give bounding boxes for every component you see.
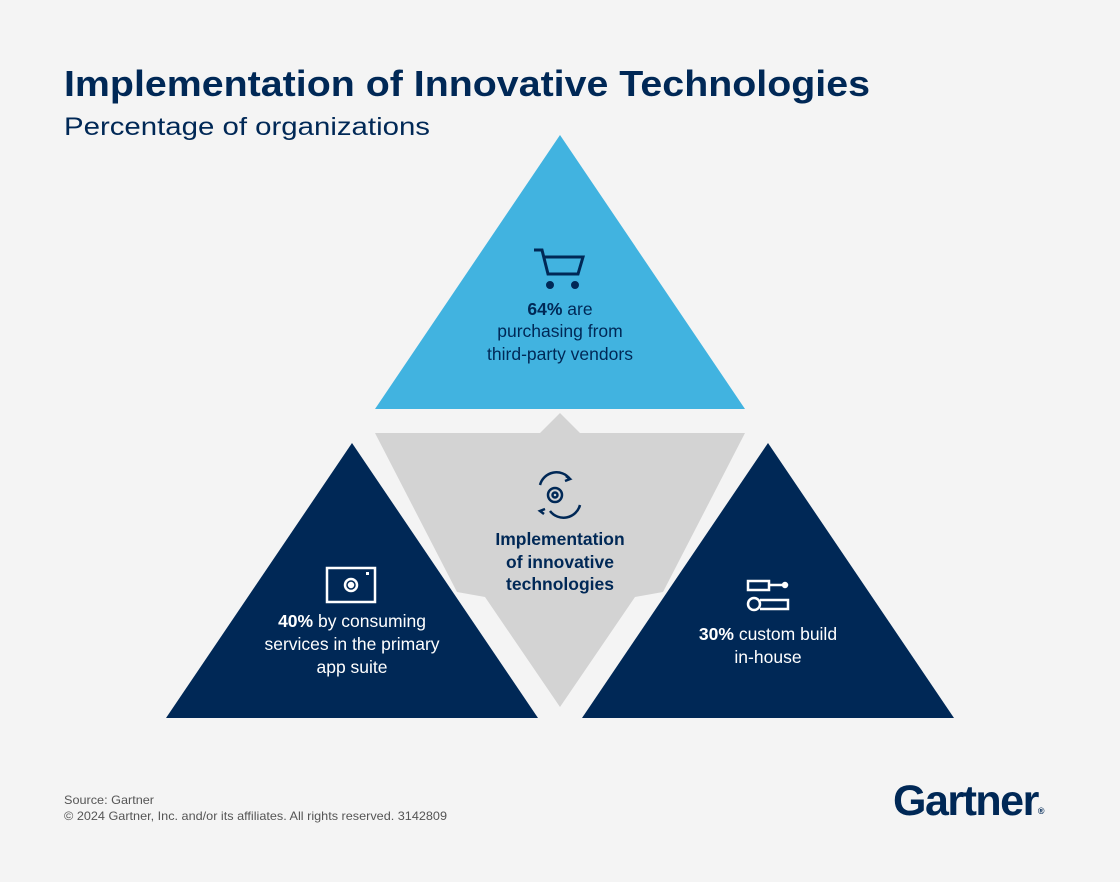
text: 40%: services in the primary bbox=[264, 634, 440, 654]
icon: tools bbox=[748, 581, 788, 610]
footer: source bbox=[64, 793, 447, 823]
icon: app window with gear bbox=[327, 568, 375, 602]
text: 40%: app suite bbox=[316, 657, 388, 677]
footer: source: © 2024 Gartner, Inc. and/or its affiliates. All rights reserved. 3142809 bbox=[64, 809, 447, 823]
panel: right navy triangle bbox=[582, 443, 954, 718]
logo: Gartner: Gartner bbox=[893, 777, 1038, 825]
text: 64%: 64% are bbox=[527, 299, 593, 319]
text: 64%: purchasing from bbox=[497, 321, 623, 341]
text: 40%: 40% by consuming bbox=[278, 611, 426, 631]
panel: center gray shape bbox=[375, 413, 745, 707]
icon: shopping cart bbox=[534, 250, 583, 288]
text: center label: technologies bbox=[506, 574, 614, 594]
logo: Gartner: ® bbox=[1038, 806, 1045, 816]
title: Implementation of Innovative Technologies bbox=[64, 63, 870, 104]
text: center label: Implementation bbox=[495, 529, 625, 549]
text: center label: of innovative bbox=[506, 552, 614, 572]
panel: left navy triangle bbox=[166, 443, 538, 718]
panel: top blue triangle bbox=[375, 135, 745, 409]
subtitle: Percentage of organizations bbox=[64, 113, 430, 141]
text: 64%: third-party vendors bbox=[487, 344, 633, 364]
text: 30%: 30% custom build bbox=[699, 624, 837, 644]
text: 30%: in-house bbox=[734, 647, 802, 667]
icon: gear with cycle arrows bbox=[540, 472, 580, 518]
footer: source: Source: Gartner bbox=[64, 793, 154, 807]
